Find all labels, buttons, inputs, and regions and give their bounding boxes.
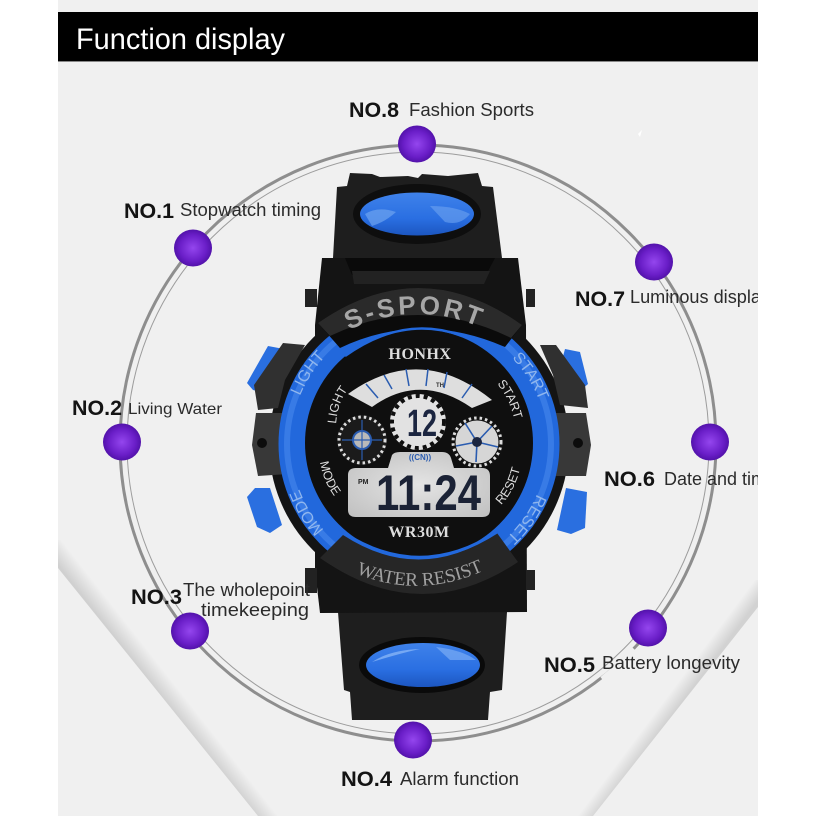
title: Function display — [76, 23, 285, 56]
callout: NO.2 — [72, 397, 223, 460]
ring around the watch — [120, 145, 716, 741]
callout: NO.8: Fashion Sports — [409, 99, 534, 120]
callout: NO.2: Living Water — [128, 401, 223, 418]
callout: NO.6: NO.6 — [604, 468, 655, 491]
callout: NO.6 — [605, 424, 758, 486]
LCD screen — [348, 452, 490, 521]
scale arc — [348, 369, 492, 408]
blue ring labels: LIGHT — [290, 350, 322, 395]
top strap — [333, 173, 502, 258]
blue ring labels — [290, 350, 550, 545]
callouts — [72, 99, 776, 791]
grey side guards — [252, 343, 591, 476]
LCD time: 11:24 — [376, 465, 481, 521]
water rating: WR30M — [388, 524, 450, 541]
blue ring labels: START — [514, 352, 550, 397]
title bar — [58, 12, 758, 62]
dial face — [305, 329, 533, 557]
thin blue arcs — [345, 328, 497, 356]
dial labels: MODE — [320, 461, 341, 496]
callout: NO.3 — [131, 579, 310, 650]
blue ring labels: RESET — [510, 495, 546, 545]
callout: NO.7 — [576, 244, 758, 307]
watch case — [269, 258, 569, 613]
watch — [208, 173, 591, 738]
callout: NO.5: NO.5 — [544, 654, 595, 677]
callout: NO.5 — [544, 610, 741, 677]
callout: NO.7: NO.7 — [575, 288, 625, 311]
dial labels: START — [498, 380, 523, 417]
callout: NO.5: Battery longevity — [602, 652, 741, 673]
callout: NO.6: Date and time — [664, 468, 776, 489]
callout: NO.1: NO.1 — [124, 200, 174, 223]
bezel text: S-SPORT — [344, 296, 484, 328]
right sub-dial — [453, 418, 501, 466]
day marker: TH — [436, 383, 444, 389]
callout: NO.3: timekeeping — [201, 599, 309, 620]
blue ring labels: MODE — [290, 490, 323, 536]
left sub-dial — [337, 415, 387, 465]
sub-dial digits: 12 — [407, 403, 437, 445]
blue ring — [292, 317, 546, 571]
bottom bezel — [320, 534, 518, 594]
callout: NO.4: Alarm function — [400, 768, 519, 789]
LCD mode text: ((CN)) — [409, 453, 431, 462]
callout: NO.4 — [341, 722, 519, 791]
callout: NO.8 — [349, 99, 534, 162]
top bezel — [318, 288, 522, 348]
callout: NO.1: Stopwatch timing — [180, 199, 321, 220]
callout: NO.3: NO.3 — [131, 586, 182, 609]
dial labels: LIGHT — [328, 385, 346, 423]
PM label: PM — [358, 479, 369, 486]
callout: NO.3: The wholepoint — [183, 579, 310, 600]
blue side buttons — [247, 346, 588, 534]
callout: NO.2: NO.2 — [72, 397, 122, 420]
callout: NO.4: NO.4 — [341, 768, 392, 791]
bottom strap — [338, 612, 507, 720]
centre sub-dial — [390, 394, 446, 450]
top lug detail — [345, 258, 495, 284]
callout: NO.1 — [124, 199, 321, 266]
dial labels — [320, 380, 523, 504]
brand: HONHX — [389, 346, 451, 363]
callout: NO.8: NO.8 — [349, 99, 399, 122]
callout: NO.7: Luminous display — [630, 286, 771, 307]
bezel text: WATER RESIST — [360, 560, 481, 586]
dial labels: RESET — [495, 466, 520, 504]
